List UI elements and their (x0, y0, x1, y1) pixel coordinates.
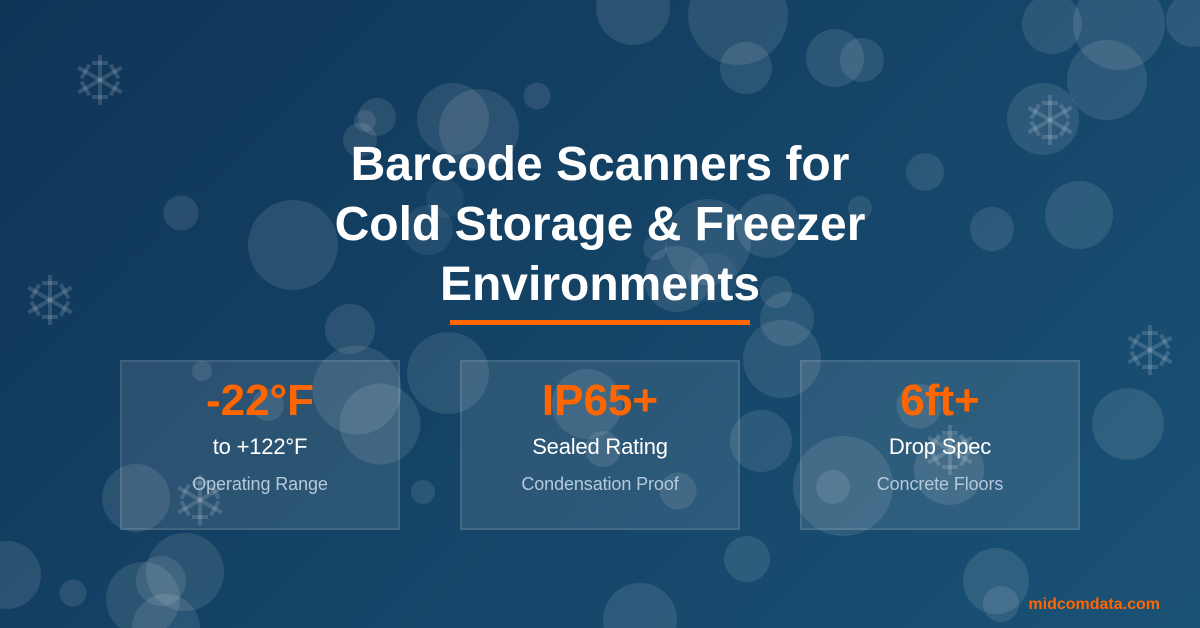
panel: operating range (120, 360, 400, 530)
title: Barcode Scanners for (351, 138, 849, 191)
stat label: to +122°F (213, 434, 307, 459)
panel: drop spec (800, 360, 1080, 530)
title: Environments (440, 258, 760, 311)
stat note: Condensation Proof (521, 474, 679, 494)
brand url: midcomdata.com (1028, 596, 1160, 613)
stat label: Sealed Rating (532, 434, 668, 459)
icon: snowflake top right (1028, 95, 1072, 145)
panel: sealed rating (460, 360, 740, 530)
stat note: Operating Range (192, 474, 328, 494)
stat value: 6ft+ (900, 376, 980, 425)
icon: snowflake behind third card (928, 425, 972, 475)
stat note: Concrete Floors (877, 474, 1003, 494)
title underline (450, 320, 750, 325)
icon: snowflake left (28, 275, 72, 325)
icon: snowflake right (1128, 325, 1172, 375)
title: Cold Storage & Freezer (335, 198, 865, 251)
title (335, 138, 865, 311)
stat value: IP65+ (542, 376, 658, 425)
stat label: Drop Spec (889, 434, 991, 459)
icon: snowflake behind first card (178, 475, 222, 525)
icon: snowflake top left (78, 55, 122, 105)
stat value: -22°F (206, 376, 314, 425)
